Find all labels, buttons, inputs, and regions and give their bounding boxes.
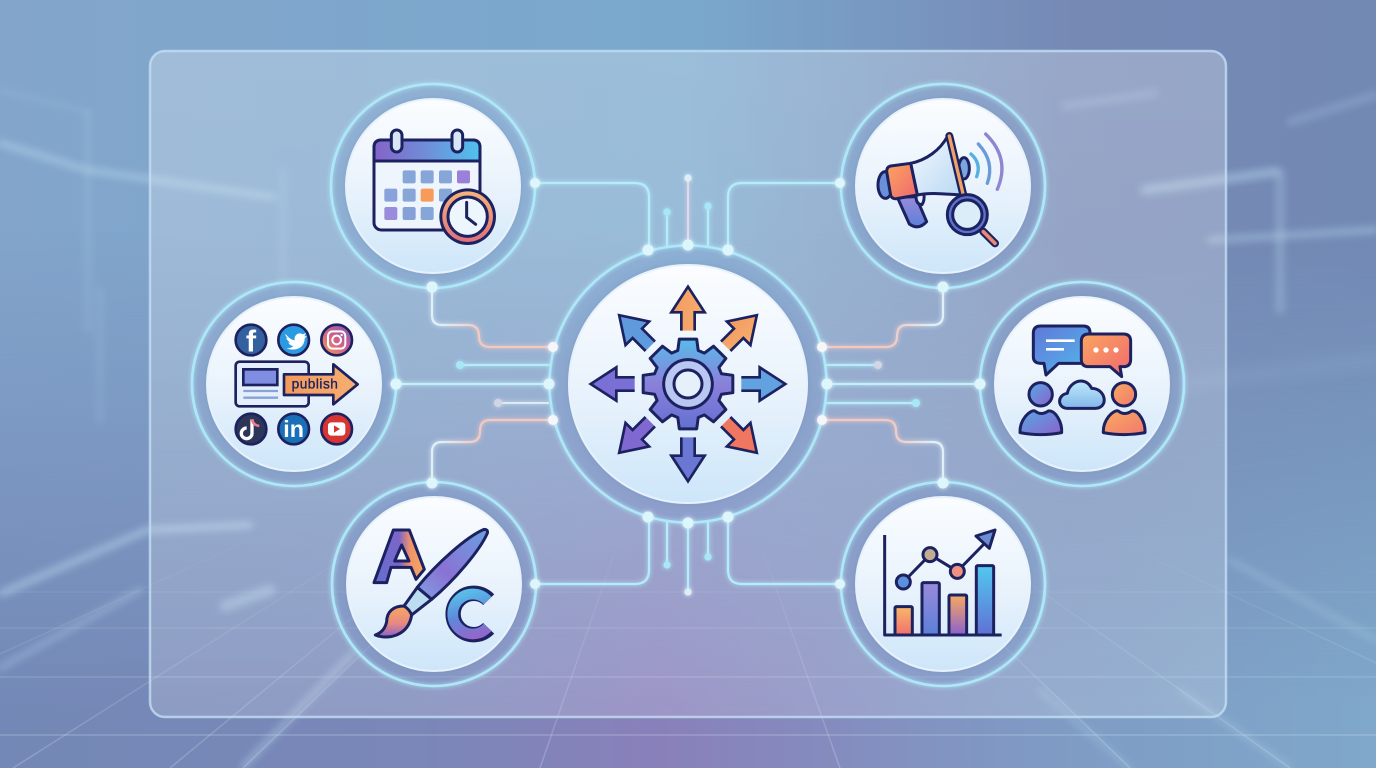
icon: bar and line chart: [885, 530, 1002, 635]
arrow: right: [741, 367, 785, 401]
icon: blue speech bubble: [1033, 326, 1090, 375]
connector nodes: [390, 174, 986, 596]
icon: instagram: [321, 325, 352, 355]
arrow: up right: [714, 303, 769, 358]
arrow: down left: [607, 410, 662, 465]
icon: facebook: f: [246, 324, 257, 358]
node: multi-channel publishing: [192, 282, 396, 486]
icon: letter A: [374, 530, 424, 583]
node: creative design: [332, 482, 536, 686]
hub disc with gear and arrows: [569, 265, 807, 503]
arrow: down: [671, 437, 705, 481]
node: content calendar: [331, 84, 535, 288]
connector lines: [396, 183, 980, 592]
node: community engagement: [980, 282, 1184, 486]
node: promotion and listening: [841, 84, 1045, 288]
connector: chart to hub: [728, 517, 840, 584]
connector: chat to hub: [827, 383, 980, 385]
arrow: up left: [607, 303, 662, 358]
connector: brush to hub: [535, 517, 649, 584]
icon: left person: [1020, 383, 1062, 435]
arrow: down right: [714, 410, 769, 465]
connector: publish to hub: [396, 383, 549, 385]
icon: letter C: [453, 593, 489, 635]
connector: calendar lower route: [432, 287, 553, 347]
node: analytics: [841, 482, 1045, 686]
icon: megaphone with magnifier: [878, 134, 1002, 243]
icon: linkedin: in: [283, 416, 304, 442]
icon: tiktok: [236, 414, 266, 444]
connector stubs: [460, 206, 916, 592]
arrow: publish: publish: [292, 377, 338, 392]
icon: gear: [643, 339, 733, 429]
icon: right person: [1103, 383, 1145, 435]
connector: megaphone lower route: [822, 287, 943, 347]
icon: cloud: [1060, 381, 1104, 408]
connector: calendar to hub: [535, 183, 649, 250]
icon: orange speech bubble: [1081, 334, 1131, 377]
arrow: left: [591, 367, 635, 401]
icon: calendar with clock: [374, 130, 496, 245]
background: perspective floor grid: [0, 340, 1376, 768]
connector: megaphone to hub: [728, 183, 840, 250]
icon: post card: [236, 362, 309, 406]
connector stubs: pale: [498, 178, 688, 403]
hub ring: [550, 246, 826, 522]
arrow: up: [671, 287, 705, 331]
connector: brush upper route: [432, 420, 553, 483]
icon: youtube: [321, 414, 352, 444]
icon: twitter: [278, 325, 309, 355]
glass panel: [150, 51, 1226, 717]
icon: paintbrush: [375, 529, 488, 637]
connector: chart upper route: [822, 420, 943, 483]
